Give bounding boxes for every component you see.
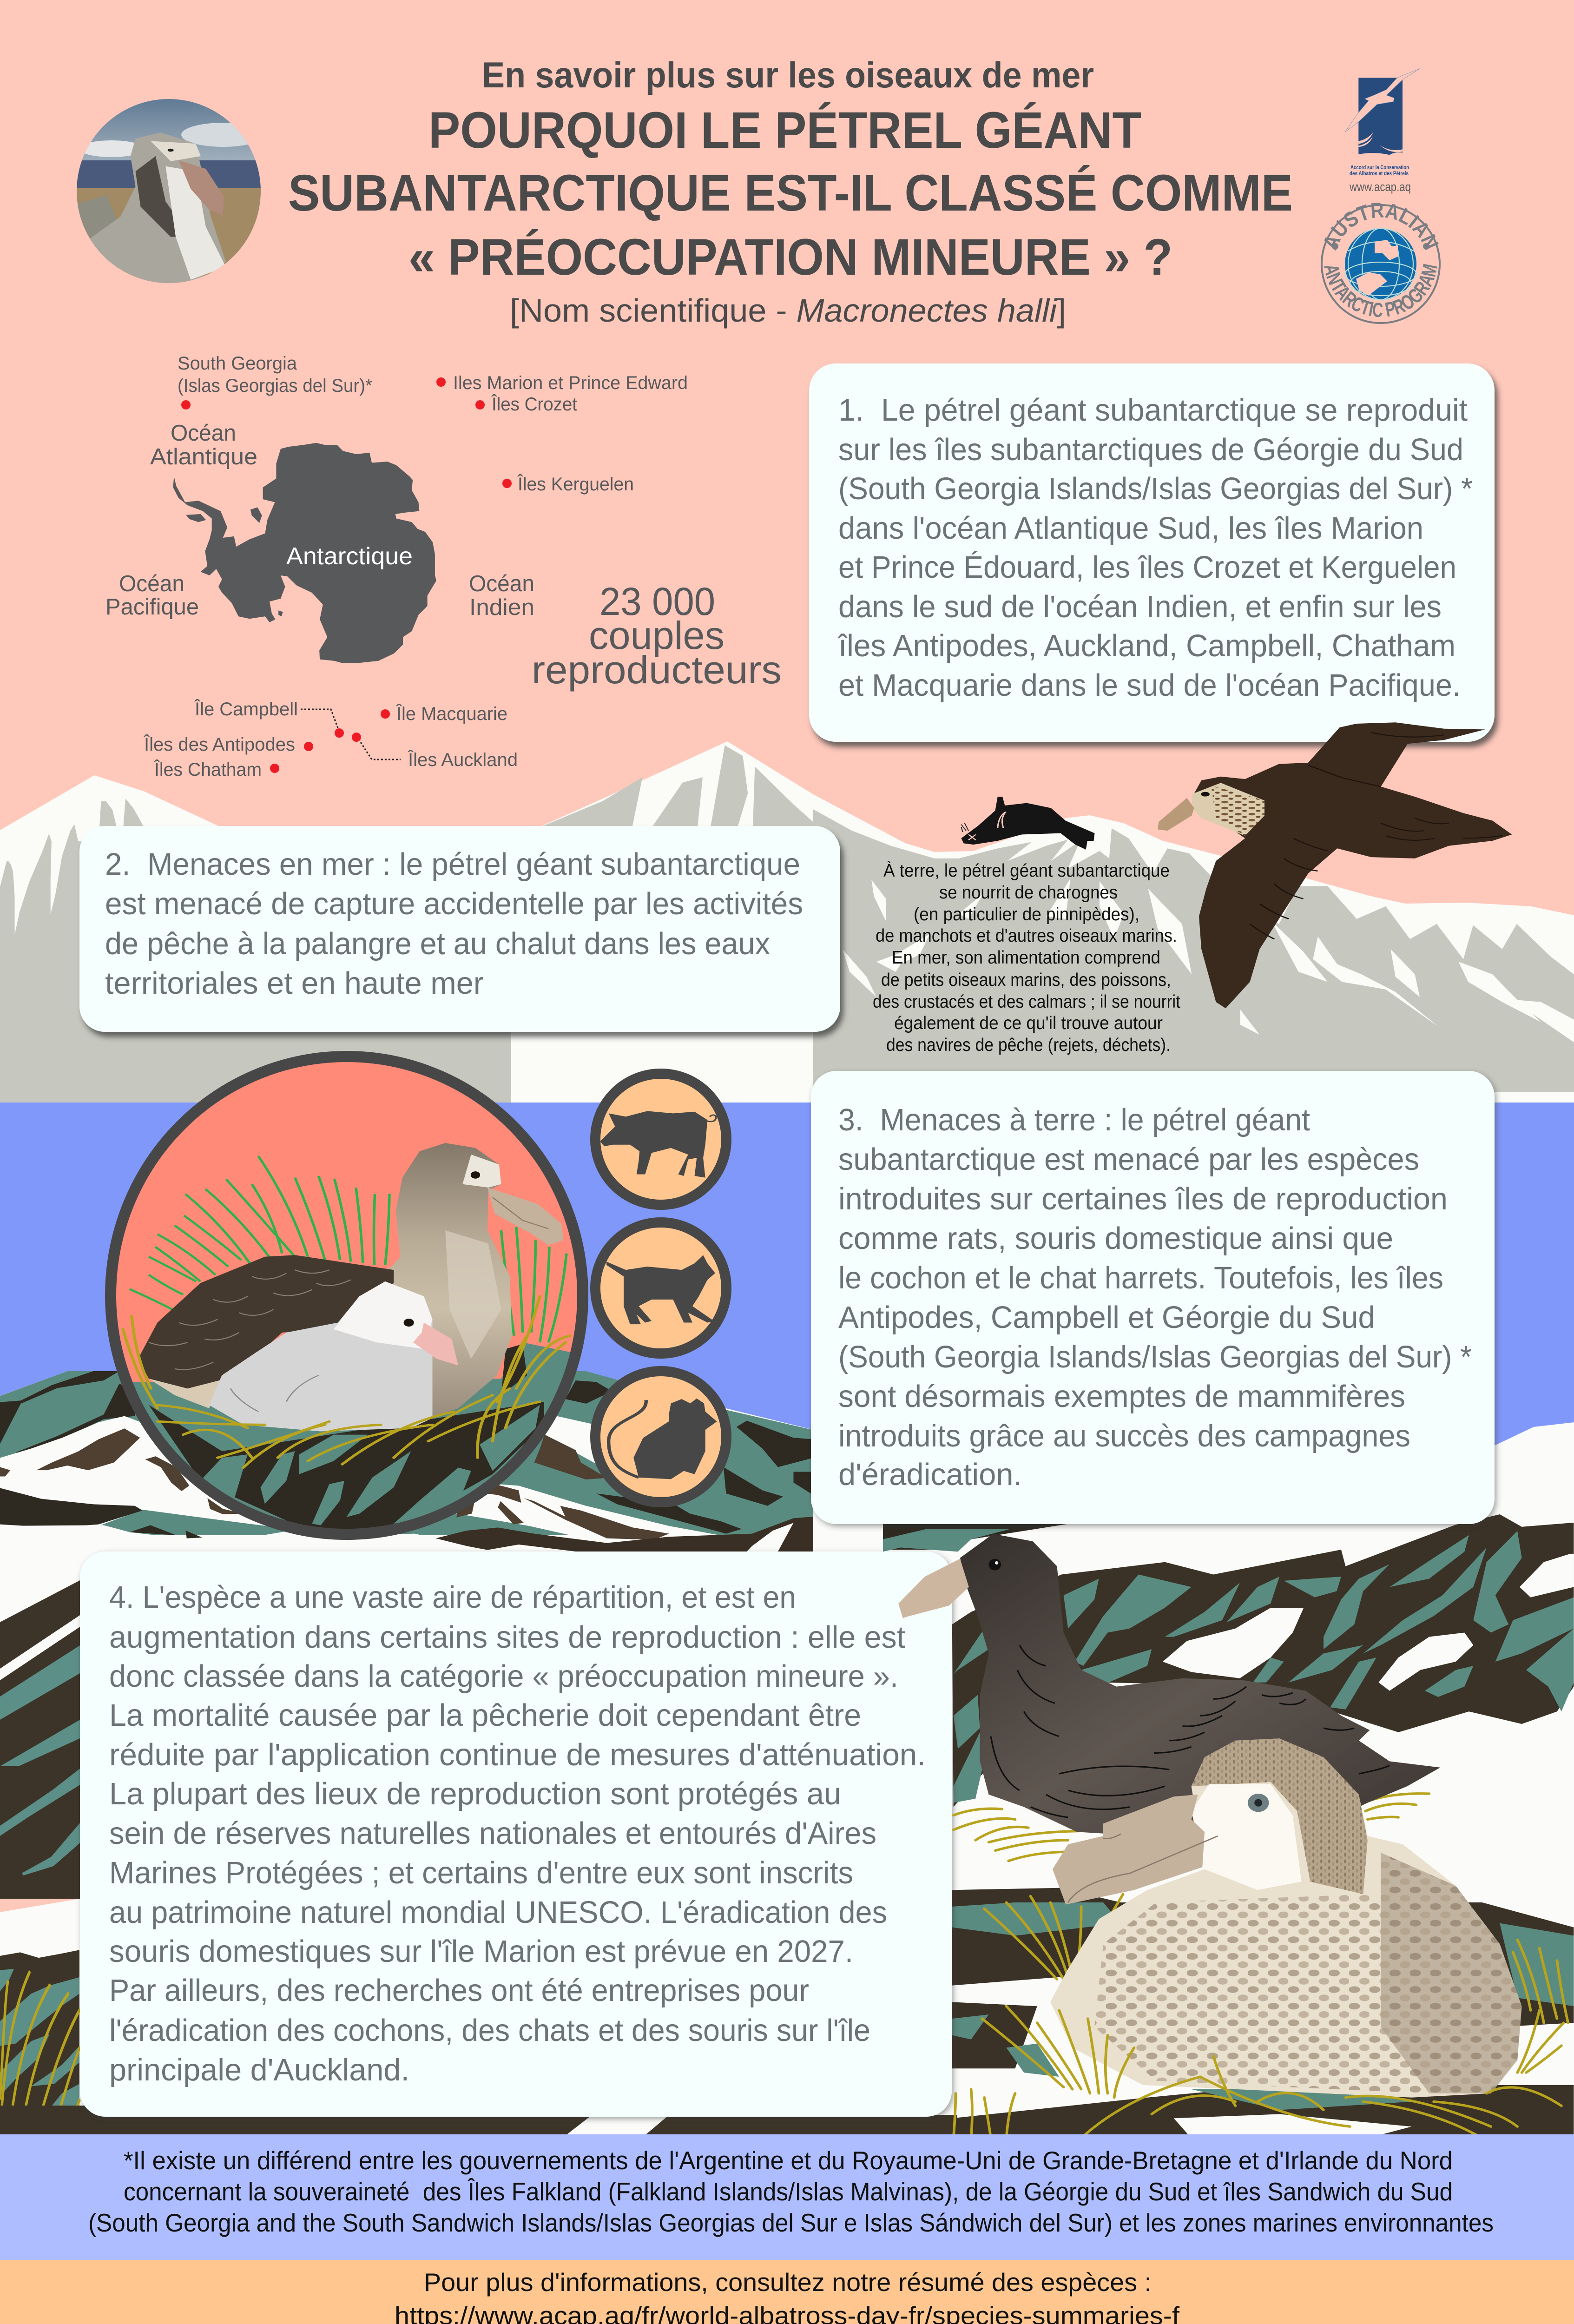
icon: pig xyxy=(595,1074,726,1205)
panel 1: breeding range: sur les îles subantarctiques de Géorgie du Sud xyxy=(838,432,1463,467)
panel 3: threats on land: d'éradication. xyxy=(838,1457,1022,1492)
background: dark band left of panel 4 xyxy=(0,1580,957,2134)
map: Antarctica with breeding sites xyxy=(105,353,688,780)
map label: Antipodes: Îles des Antipodes xyxy=(144,734,295,755)
panel 4: conservation status: donc classée dans la catégorie « préoccupation mineure ». xyxy=(109,1659,898,1694)
map label: Atlantic Ocean xyxy=(150,421,257,469)
statistic: breeding pairs: couples xyxy=(589,614,724,657)
panel 1: breeding range: (South Georgia Islands/Islas Georgias del Sur) * xyxy=(838,471,1473,506)
map label: Atlantic Ocean: Océan xyxy=(171,421,236,446)
logo: ACAP: des Albatros et des Pétrels xyxy=(1350,170,1409,177)
panel 3: threats on land: Antipodes, Campbell et Géorgie du Sud xyxy=(838,1300,1375,1335)
panel 3: threats on land: le cochon et le chat harrets. Toutefois, les îles xyxy=(838,1261,1443,1295)
map label: Pacific Ocean: Pacifique xyxy=(105,594,199,620)
footer: sovereignty note: concernant la souveraineté des Îles Falkland (Falkland Islands/Islas Malvinas), de la Géorgie du Sud et îles Sandwich du Sud xyxy=(124,2177,1453,2206)
map label: South Georgia: (Islas Georgias del Sur)* xyxy=(178,376,372,396)
text block: diet xyxy=(873,861,1180,1055)
map label: Kerguelen: Îles Kerguelen xyxy=(517,474,634,495)
adult wing xyxy=(138,1255,394,1388)
text block: diet: En mer, son alimentation comprend xyxy=(892,948,1160,968)
heading: title line 3: « PRÉOCCUPATION MINEURE » ? xyxy=(408,229,1172,286)
statistic: breeding pairs: reproducteurs xyxy=(532,648,782,692)
panel 4: conservation status: principale d'Auckland. xyxy=(109,2053,409,2087)
heading: scientific name: [Nom scientifique - Macronectes halli] xyxy=(510,292,1066,329)
panel 4: conservation status: La plupart des lieux de reproduction sont protégés au xyxy=(109,1776,841,1811)
panel 1: breeding range: dans le sud de l'océan Indien, et enfin sur les xyxy=(838,589,1442,624)
panel 1: breeding range: et Prince Édouard, les îles Crozet et Kerguelen xyxy=(838,550,1456,585)
map label: Auckland xyxy=(352,733,518,770)
medallion ring xyxy=(111,1056,583,1534)
footer: sovereignty note: (South Georgia and the South Sandwich Islands/Islas Georgias del Sur e Islas Sándwich del Sur) et les zones marines environnantes xyxy=(88,2208,1494,2237)
panel 4: conservation status: La mortalité causée par la pêcherie doit cependant être xyxy=(109,1698,861,1733)
map label: Pacific Ocean xyxy=(105,571,199,620)
panel 1: breeding range xyxy=(809,363,1495,742)
map label: Indian Ocean xyxy=(469,571,534,620)
illustration: two nesting petrels xyxy=(898,1534,1568,2138)
panel 1: breeding range: 1. Le pétrel géant subantarctique se reproduit xyxy=(838,393,1468,428)
map label: South Georgia: South Georgia xyxy=(178,353,297,374)
text block: diet: À terre, le pétrel géant subantarctique xyxy=(883,861,1170,881)
panel 3: threats on land xyxy=(811,1071,1495,1524)
foreground nest grass xyxy=(954,2006,1564,2138)
panel 1: breeding range: et Macquarie dans le sud de l'océan Pacifique. xyxy=(838,668,1461,703)
panel 3: threats on land: 3. Menaces à terre : le pétrel géant xyxy=(838,1103,1310,1137)
footer: more information: Pour plus d'informations, consultez notre résumé des espèces : xyxy=(424,2268,1152,2297)
background: lower striped mountains and snow xyxy=(0,1371,1574,2138)
pale-phase petrel xyxy=(1050,1738,1522,2098)
panel 2: threats at sea: est menacé de capture accidentelle par les activités xyxy=(105,886,803,921)
background: dark band and snow right of panel 4 xyxy=(883,1514,1574,2138)
map label: Indian Ocean: Indien xyxy=(469,595,534,620)
map label: Chatham: Îles Chatham xyxy=(154,759,262,780)
panel 2: threats at sea: territoriales et en haute mer xyxy=(105,966,484,1001)
panel 4: conservation status: Marines Protégées ; et certains d'entre eux sont inscrits xyxy=(109,1855,853,1890)
map label: Indian Ocean: Océan xyxy=(469,571,534,596)
grass behind birds xyxy=(954,1794,1568,2023)
panel 4: conservation status: réduite par l'application continue de mesures d'atténuation. xyxy=(109,1737,926,1772)
icon: cat xyxy=(595,1222,726,1353)
map label: Crozet: Îles Crozet xyxy=(491,394,577,415)
text block: diet: également de ce qu'il trouve autour xyxy=(894,1013,1163,1033)
map label: Macquarie: Île Macquarie xyxy=(396,703,507,724)
background: grey snowy mountains xyxy=(0,741,1574,1116)
logo: Australian Antarctic Program xyxy=(1318,198,1443,323)
icon: dead seal carcass xyxy=(961,797,1095,850)
panel 3: threats on land: (South Georgia Islands/Islas Georgias del Sur) * xyxy=(838,1340,1472,1374)
panel 3: threats on land: introduites sur certaines îles de reproduction xyxy=(838,1182,1448,1216)
illustration: flying petrel xyxy=(1158,722,1512,1008)
panel 2: threats at sea: de pêche à la palangre et au chalut dans les eaux xyxy=(105,926,770,961)
panel 1: breeding range: îles Antipodes, Auckland, Campbell, Chatham xyxy=(837,628,1455,663)
panel 2: threats at sea: 2. Menaces en mer : le pétrel géant subantarctique xyxy=(105,847,800,882)
logo: ACAP xyxy=(1345,68,1420,194)
statistic: breeding pairs: 23 000 xyxy=(599,580,715,623)
map label: Campbell xyxy=(194,699,344,738)
map label: South Georgia xyxy=(178,353,372,409)
map label: Atlantic Ocean: Atlantique xyxy=(150,444,257,469)
footer: more information xyxy=(0,2260,1574,2324)
panel 3: threats on land: comme rats, souris domestique ainsi que xyxy=(838,1221,1393,1256)
panel 4: conservation status xyxy=(80,1552,952,2117)
footer: sovereignty note: *Il existe un différend entre les gouvernements de l'Argentine et du Royaume-Uni de Grande-Bretagne et d'Irlande du Nord xyxy=(124,2146,1453,2175)
text block: diet: des crustacés et des calmars ; il se nourrit xyxy=(873,992,1180,1012)
panel 4: conservation status: sein de réserves naturelles nationales et entourés d'Aires xyxy=(109,1816,876,1851)
logo: Australian Antarctic Program: AUSTRALIAN xyxy=(1318,198,1443,253)
footer: sovereignty note xyxy=(0,2134,1574,2260)
panel 4: conservation status: Par ailleurs, des recherches ont été entreprises pour xyxy=(109,1973,809,2008)
panel 3: threats on land: sont désormais exemptes de mammifères xyxy=(838,1379,1405,1414)
icon: mouse xyxy=(595,1371,726,1502)
ground inside medallion xyxy=(93,1342,587,1540)
panel 2: threats at sea xyxy=(79,826,840,1032)
heading: title line 1: POURQUOI LE PÉTREL GÉANT xyxy=(428,102,1141,159)
green tussock grass xyxy=(130,1156,566,1342)
statistic: breeding pairs xyxy=(532,580,782,692)
heading: eyebrow: En savoir plus sur les oiseaux de mer xyxy=(482,54,1094,95)
logo: Australian Antarctic Program: ANTARCTIC PROGRAM xyxy=(1319,262,1442,322)
map label: Campbell: Île Campbell xyxy=(194,699,298,720)
text block: diet: de manchots et d'autres oiseaux marins. xyxy=(876,926,1177,946)
panel 4: conservation status: au patrimoine naturel mondial UNESCO. L'éradication des xyxy=(109,1895,887,1930)
panel 4: conservation status: augmentation dans certains sites de reproduction : elle est xyxy=(109,1620,905,1655)
text block: diet: se nourrit de charognes xyxy=(939,883,1118,903)
nest straw xyxy=(123,1296,570,1468)
panel 3: threats on land: introduits grâce au succès des campagnes xyxy=(838,1419,1410,1453)
map label: Pacific Ocean: Océan xyxy=(119,571,184,596)
panel 4: conservation status: 4. L'espèce a une vaste aire de répartition, et est en xyxy=(109,1580,796,1615)
map shape: Antarctic continent xyxy=(173,443,436,663)
panel 1: breeding range: dans l'océan Atlantique Sud, les îles Marion xyxy=(838,511,1423,546)
title block xyxy=(288,54,1293,329)
adult petrel xyxy=(308,1143,512,1418)
heading: title line 2: SUBANTARCTIQUE EST-IL CLASSÉ COMME xyxy=(288,165,1293,222)
text block: diet: (en particulier de pinnipèdes), xyxy=(914,905,1139,924)
map label: Antarctique: Antarctique xyxy=(286,543,413,570)
text block: diet: des navires de pêche (rejets, déchets). xyxy=(886,1035,1171,1055)
logo: ACAP: www.acap.aq xyxy=(1349,180,1411,194)
map label: Marion and Prince Edward: Iles Marion et Prince Edward xyxy=(453,373,688,393)
text block: diet: de petits oiseaux marins, des poissons, xyxy=(881,970,1171,990)
dark-phase petrel xyxy=(960,1534,1440,1844)
panel 4: conservation status: l'éradication des cochons, des chats et des souris sur l'île xyxy=(109,2013,870,2048)
logo: ACAP: Accord sur la Conservation xyxy=(1350,164,1409,171)
background: blue sea xyxy=(0,1103,1574,1456)
illustration: nest medallion xyxy=(93,1051,588,1540)
photo: petrel portrait xyxy=(74,98,265,286)
panel 4: conservation status: souris domestiques sur l'île Marion est prévue en 2027. xyxy=(109,1934,853,1969)
map label: Auckland: Îles Auckland xyxy=(408,749,518,770)
panel 3: threats on land: subantarctique est menacé par les espèces xyxy=(838,1142,1419,1177)
chick xyxy=(209,1283,433,1432)
